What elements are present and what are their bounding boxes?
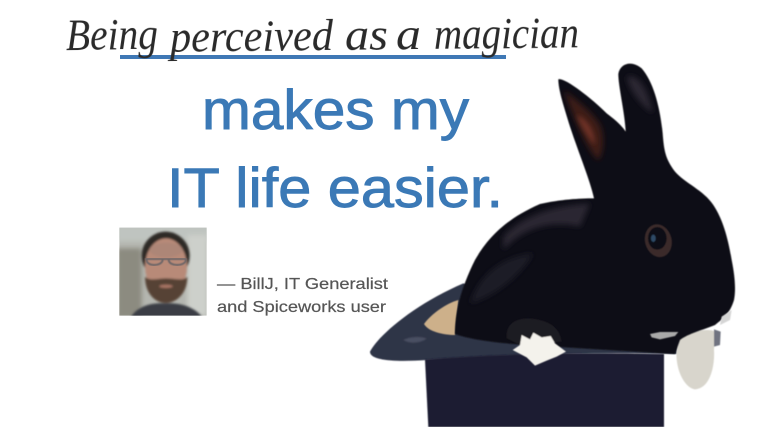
attribution: and Spiceworks user bbox=[217, 299, 387, 316]
illustration: rabbit in top hat bbox=[370, 64, 735, 427]
handwritten heading bbox=[66, 5, 579, 63]
eye bbox=[641, 221, 676, 260]
shirt bbox=[130, 303, 203, 318]
chest white fur bbox=[650, 332, 678, 339]
rabbit body bbox=[455, 64, 735, 354]
main statement bbox=[167, 78, 503, 219]
attribution bbox=[217, 276, 389, 316]
glasses bbox=[145, 259, 187, 265]
hat brim bbox=[370, 283, 677, 361]
handwritten heading: Being bbox=[66, 10, 158, 60]
back paw bbox=[676, 329, 721, 389]
hat opening lining bbox=[424, 300, 458, 335]
fur highlights bbox=[627, 76, 653, 113]
handwritten heading: as bbox=[345, 10, 388, 60]
main statement: makes my bbox=[202, 78, 469, 141]
attribution: — BillJ, IT Generalist bbox=[217, 276, 389, 293]
inner ear bbox=[564, 91, 603, 160]
hat crown bbox=[425, 353, 664, 427]
heading underline bbox=[120, 55, 506, 59]
beard bbox=[145, 277, 187, 303]
portrait photo of BillJ bbox=[119, 228, 207, 316]
main statement: IT life easier. bbox=[167, 156, 503, 219]
handwritten heading: magician bbox=[434, 8, 579, 59]
face bbox=[143, 236, 189, 280]
front paw bbox=[507, 318, 566, 366]
hair bbox=[140, 230, 192, 268]
handwritten heading: a bbox=[396, 10, 421, 59]
handwritten heading: perceived bbox=[167, 11, 334, 62]
